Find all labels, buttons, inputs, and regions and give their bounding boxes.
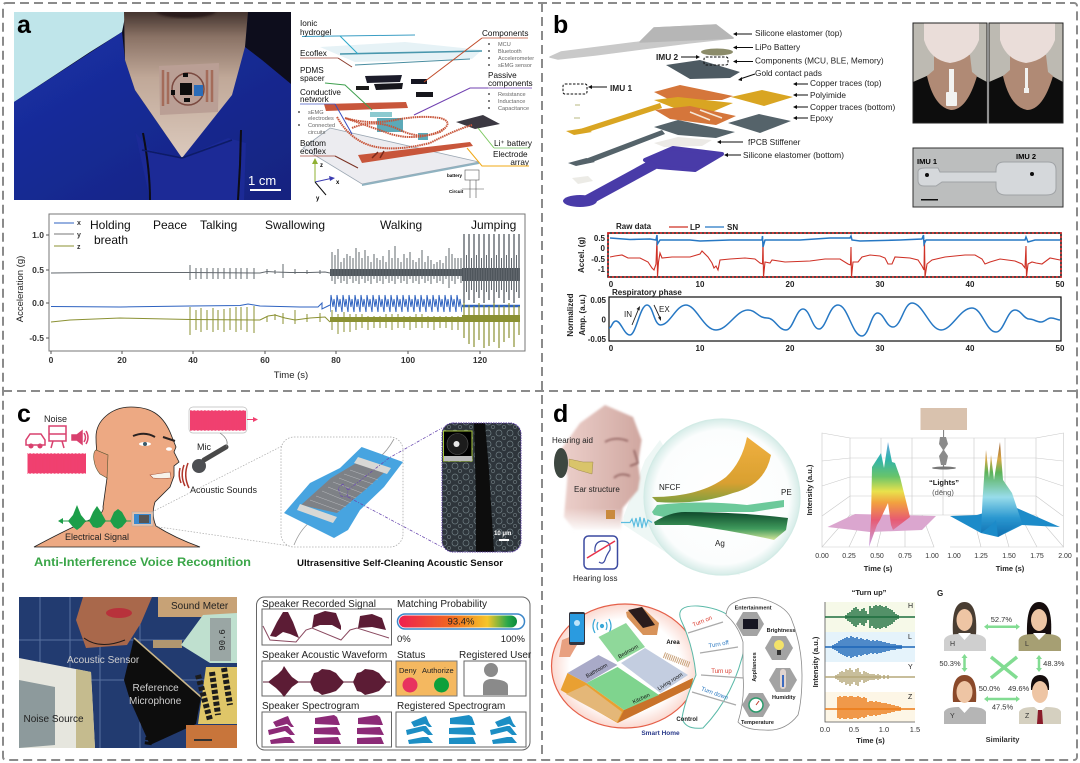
chart: respiratory phase: EX <box>659 305 670 314</box>
diagram sublabels: sEMG <box>308 110 324 116</box>
layer labels: Copper traces (bottom) <box>810 102 896 112</box>
room labels: Area <box>666 640 680 646</box>
photo: measurement setup <box>19 597 237 748</box>
xyz axes: z <box>320 163 323 169</box>
similarity values: 49.6% <box>1008 684 1030 693</box>
axes: 120 <box>473 355 487 365</box>
axes: -0.5 <box>29 333 44 343</box>
activity labels: Swallowing <box>265 218 325 232</box>
person letters: Y <box>950 713 955 720</box>
exploded device diagram <box>302 35 500 186</box>
icons: car, train, speaker <box>26 426 88 448</box>
diagram labels: array <box>510 158 530 167</box>
diagram labels: hydrogel <box>300 28 332 37</box>
layer labels: Copper traces (top) <box>810 78 882 88</box>
smart home illustration <box>552 604 698 737</box>
chart: raw acceleration data: 30 <box>876 280 885 289</box>
purple zoom lines <box>338 428 442 547</box>
3D waterfall chart <box>805 408 1072 573</box>
axes: 0 <box>49 355 54 365</box>
3D waterfall chart: 0.00 <box>815 553 829 560</box>
panel c <box>17 400 532 750</box>
photo: device on neck <box>913 23 987 123</box>
room labels: Kitchen <box>632 692 651 706</box>
person Y <box>944 675 986 724</box>
panel d <box>552 400 1072 745</box>
chart: raw acceleration data: Accel. (g) <box>577 237 586 273</box>
similarity values: 47.5% <box>992 702 1013 712</box>
xyz axes <box>312 158 340 202</box>
band labels <box>908 603 913 701</box>
photo: measurement setup: 90.6 <box>218 629 228 651</box>
icon: hearing loss <box>573 536 618 583</box>
y trace (gray) <box>51 234 520 303</box>
electrical signal waveform <box>58 505 131 530</box>
icon: phone in hand <box>559 612 585 657</box>
chart: respiratory phase: 0 <box>609 344 614 353</box>
axis titles: Time (s) <box>274 370 308 381</box>
chart: raw acceleration data <box>577 222 1065 289</box>
photo labels: Sound Meter <box>171 601 229 612</box>
appliances panel: Brightness <box>767 628 795 634</box>
acoustic waveform plot <box>262 661 392 697</box>
photo labels: Microphone <box>129 696 182 707</box>
z trace (olive) <box>51 303 520 348</box>
NFCF / PE / Ag layers: PE <box>781 488 792 497</box>
chart: respiratory phase: 50 <box>1056 344 1065 353</box>
axes: 40 <box>188 355 198 365</box>
chart: raw acceleration data: 0 <box>601 244 606 253</box>
axes: 80 <box>331 355 341 365</box>
3D waterfall chart: 1.00 <box>947 553 961 560</box>
person letters <box>950 641 1030 720</box>
exploded patch layers <box>550 25 793 207</box>
right waterfall surface <box>950 505 1060 537</box>
diagram labels: Bottom <box>300 139 326 148</box>
chart: respiratory phase: Amp. (a.u.) <box>578 294 587 336</box>
heading letter b: b <box>553 11 568 39</box>
chart: respiratory phase: -0.05 <box>588 335 607 344</box>
chart: turn up waveforms: Intensity (a.u.) <box>811 636 820 687</box>
sound wave <box>621 517 652 528</box>
matching probability bar: 93.4% <box>448 616 475 628</box>
similarity values: 50.0% <box>979 684 1000 693</box>
similarity values: 52.7% <box>991 615 1012 624</box>
left waterfall surface <box>828 514 936 532</box>
neck sensor patch <box>132 512 153 526</box>
waveform Y <box>825 668 915 686</box>
circuit inset: Circuit <box>449 189 464 194</box>
chart: raw acceleration data: 40 <box>966 280 975 289</box>
axes: 60 <box>260 355 270 365</box>
chart: acceleration vs time <box>15 214 525 381</box>
similarity values: 50.3% <box>939 659 961 668</box>
chart: respiratory phase: 0.05 <box>590 296 607 305</box>
chart: raw acceleration data: -0.5 <box>591 255 606 264</box>
acoustic sounds label: Acoustic Sounds <box>190 485 258 495</box>
control crescent: Control <box>676 717 698 723</box>
NFCF / PE / Ag layers <box>652 437 792 548</box>
chart: respiratory phase: 20 <box>786 344 795 353</box>
chart: respiratory phase <box>566 288 1065 353</box>
panel b <box>550 11 1065 353</box>
dashboard labels: Speaker Acoustic Waveform <box>262 650 387 661</box>
3D waterfall chart: 1.00 <box>925 553 939 560</box>
diagram labels: Electrode <box>493 150 528 159</box>
status box: Authorize <box>422 666 454 675</box>
layer arrows <box>590 34 808 155</box>
layer labels: Gold contact pads <box>755 68 822 78</box>
sensor illustration <box>281 437 403 547</box>
waveform H <box>825 605 915 629</box>
head labels: Hearing aid <box>552 436 593 445</box>
appliances panel: Temperature <box>741 720 774 726</box>
activity labels: breath <box>94 233 128 247</box>
chart: turn up waveforms: Time (s) <box>856 736 885 745</box>
waveform Z <box>825 696 915 719</box>
diagram labels: ecoflex <box>300 147 326 156</box>
layer labels <box>610 28 896 160</box>
diagram sublabels: Accelerometer <box>498 56 534 62</box>
chart labels: Time (s) <box>996 564 1025 573</box>
diagram labels: Ionic <box>300 19 317 28</box>
chart: raw acceleration data: 50 <box>1056 280 1065 289</box>
chart: respiratory phase: Respiratory phase <box>612 288 682 297</box>
room labels: Living room <box>657 672 684 692</box>
speaker spectrogram plot <box>262 712 392 747</box>
activity labels: Holding <box>90 218 131 232</box>
chart: raw acceleration data: Raw data <box>616 222 652 231</box>
control crescent <box>676 606 745 728</box>
panel a <box>14 4 534 381</box>
scale bar 1 cm: 1 cm <box>248 173 276 188</box>
head illustration <box>554 405 642 532</box>
dashboard labels: Registered User <box>459 650 532 661</box>
band labels: H <box>908 603 913 610</box>
diagram sublabels: Connected <box>308 123 335 129</box>
icon: wifi arcs <box>593 619 611 633</box>
3D waterfall chart: 2.00 <box>1058 553 1072 560</box>
axes: 0.0 <box>32 298 44 308</box>
diagram labels: Components <box>482 29 528 38</box>
bubble cone <box>621 440 740 575</box>
layer labels: IMU 1 <box>610 83 633 93</box>
xyz axes: y <box>316 196 320 202</box>
layer labels: LiPo Battery <box>755 42 801 52</box>
appliances panel: Entertainment <box>735 606 772 612</box>
3D waterfall chart: 0.75 <box>898 553 912 560</box>
chart: turn up waveforms: “Turn up” <box>852 588 887 597</box>
circuit inset <box>447 170 484 198</box>
registered spectrogram plot <box>396 712 526 747</box>
chart: respiratory phase: 40 <box>966 344 975 353</box>
dashboard labels: Matching Probability <box>397 599 487 610</box>
person letters: Z <box>1025 713 1030 720</box>
diagram sublabels <box>298 42 534 136</box>
3D waterfall chart: 1.75 <box>1030 553 1044 560</box>
person Z <box>1019 675 1061 724</box>
activity labels: Walking <box>380 218 422 232</box>
illustrated head and shoulders <box>34 407 200 547</box>
mic icon and label <box>192 433 227 473</box>
similarity diagram G <box>937 589 1065 744</box>
layer labels: Polyimide <box>810 90 846 100</box>
photo labels: Noise Source <box>24 714 84 725</box>
waveform L <box>825 636 915 658</box>
heading letter c: c <box>17 400 31 428</box>
similarity arrows <box>964 627 1039 699</box>
diagram labels: network <box>300 95 330 104</box>
chart labels <box>805 464 1025 573</box>
person letters: L <box>1025 641 1029 648</box>
circuit inset: battery <box>447 173 463 178</box>
mic icon and label: Mic <box>197 442 211 452</box>
diagram sublabels: sEMG sensor <box>498 63 532 69</box>
head labels: Ear structure <box>574 485 620 494</box>
layer labels: Components (MCU, BLE, Memory) <box>755 56 884 66</box>
axes: 20 <box>117 355 127 365</box>
layer labels: Epoxy <box>810 113 834 123</box>
chart: raw acceleration data: SN <box>727 223 738 232</box>
icon: hearing loss: Hearing loss <box>573 574 617 583</box>
electrical signal label: Electrical Signal <box>65 532 129 542</box>
bottom headings <box>34 555 503 569</box>
status box: Deny <box>399 666 417 675</box>
x trace (blue) <box>51 293 520 315</box>
smart home caption: Smart Home <box>641 730 680 737</box>
chart: raw acceleration data: 0 <box>609 280 614 289</box>
3D waterfall chart: 1.50 <box>1002 553 1016 560</box>
chart: raw acceleration data: 0.5 <box>594 234 606 243</box>
diagram sublabels: Inductance <box>498 99 525 105</box>
NFCF / PE / Ag layers: NFCF <box>659 483 680 492</box>
photo: device with IMU labels <box>913 148 1063 207</box>
dashboard labels: Speaker Spectrogram <box>262 701 359 712</box>
chart: respiratory phase: Normalized <box>566 293 575 337</box>
photo labels: Reference <box>132 683 179 694</box>
axes: 0.5 <box>32 265 44 275</box>
appliances panel: Appliances <box>752 652 758 682</box>
matching probability bar <box>397 614 526 645</box>
control crescent: Turn down <box>700 686 729 702</box>
dashboard labels <box>262 599 532 712</box>
chart: respiratory phase: IN <box>624 310 632 319</box>
material bubble <box>644 419 800 575</box>
chart labels: (dēng) <box>932 488 954 497</box>
microphone recording waveform <box>189 407 258 433</box>
diagram labels: Passive <box>488 71 517 80</box>
chart: turn up waveforms <box>811 588 920 745</box>
3D waterfall chart: 0.50 <box>870 553 884 560</box>
similarity diagram G: G <box>937 589 943 598</box>
noise waveform <box>28 454 86 473</box>
diagram labels: Conductive <box>300 88 341 97</box>
person letters: H <box>950 641 955 648</box>
appliances panel: Humidity <box>772 695 796 701</box>
heading letter d: d <box>553 400 568 428</box>
chart: turn up waveforms: 0.5 <box>849 725 859 734</box>
control crescent: Turn up <box>711 669 732 675</box>
control crescent: Turn off <box>708 640 730 650</box>
3D waterfall chart: 1.25 <box>974 553 988 560</box>
legend: y <box>77 232 81 239</box>
photo: device with IMU labels: IMU 2 <box>1016 152 1036 161</box>
diagram sublabels: MCU <box>498 42 511 48</box>
similarity values <box>939 615 1065 744</box>
head labels <box>552 436 620 494</box>
axes: 1.0 <box>32 230 44 240</box>
room labels: Bedroom <box>617 644 640 660</box>
chart labels: Intensity (a.u.) <box>805 464 814 515</box>
band labels: L <box>908 634 912 641</box>
chart: turn up waveforms: 0.0 <box>820 725 830 734</box>
room labels: Bathroom <box>585 662 609 680</box>
dashboard labels: Status <box>397 650 425 661</box>
legend <box>54 220 81 251</box>
3D waterfall chart: 0.25 <box>842 553 856 560</box>
noise label: Noise <box>44 414 67 424</box>
bottom headings: Ultrasensitive Self-Cleaning Acoustic Sensor <box>297 558 503 569</box>
person L <box>1019 602 1061 651</box>
chart: raw acceleration data: LP <box>690 223 701 232</box>
photo: neck sensor on person in blue hoodie <box>14 4 291 200</box>
diagram sublabels: circuits <box>308 130 326 136</box>
SEM micrograph: 10 μm <box>494 531 511 537</box>
chart: respiratory phase: 0 <box>602 316 607 324</box>
layer labels: Silicone elastomer (bottom) <box>743 150 844 160</box>
similarity values: Similarity <box>986 735 1020 744</box>
axis titles <box>15 256 308 381</box>
NFCF / PE / Ag layers: Ag <box>715 539 725 548</box>
diagram labels: components <box>488 79 533 88</box>
control crescent: Turn on <box>692 615 713 629</box>
dashboard labels: Speaker Recorded Signal <box>262 599 376 610</box>
axis titles: Acceleration (g) <box>15 256 26 322</box>
photo: device on neck, second view <box>989 23 1063 123</box>
lamp <box>920 408 967 470</box>
chart: respiratory phase: 10 <box>696 344 705 353</box>
diagram labels: Li⁺ battery <box>494 139 533 148</box>
photo: device with IMU labels: IMU 1 <box>917 157 937 166</box>
heading letter a: a <box>17 11 32 39</box>
diagram arrows <box>325 36 529 168</box>
SEM micrograph <box>442 423 521 552</box>
recorded signal plot <box>262 609 392 645</box>
axes <box>29 230 487 365</box>
chart: raw acceleration data: -1 <box>598 265 606 274</box>
chart: raw acceleration data: 20 <box>786 280 795 289</box>
photo labels: Acoustic Sensor <box>67 655 140 666</box>
authentication dashboard <box>256 597 532 750</box>
layer labels: fPCB Stiffener <box>748 137 801 147</box>
matching probability bar: 100% <box>501 634 526 645</box>
activity labels: Peace <box>153 218 187 232</box>
chart: turn up waveforms: 1.0 <box>879 725 889 734</box>
diagram labels: spacer <box>300 74 325 83</box>
chart: respiratory phase: 30 <box>876 344 885 353</box>
band labels: Z <box>908 694 913 701</box>
diagram labels: Ecoflex <box>300 49 327 58</box>
xyz axes: x <box>336 180 340 186</box>
chart: raw acceleration data: 10 <box>696 280 705 289</box>
legend: z <box>77 244 81 251</box>
diagram labels: PDMS <box>300 66 324 75</box>
diagram sublabels: Bluetooth <box>498 49 522 55</box>
band labels: Y <box>908 664 913 671</box>
legend: x <box>77 220 81 227</box>
diagram sublabels: Capacitance <box>498 106 529 112</box>
dashboard labels: Registered Spectrogram <box>397 701 505 712</box>
diagram sublabels: Resistance <box>498 92 526 98</box>
activity labels: Jumping <box>471 218 516 232</box>
layer labels: Silicone elastomer (top) <box>755 28 842 38</box>
house rooms <box>561 607 693 723</box>
activity labels <box>90 218 516 247</box>
layer labels: IMU 2 <box>656 52 679 62</box>
chart labels: “Lights” <box>929 478 959 487</box>
diagram sublabels: electrodes <box>308 116 334 122</box>
photo labels <box>24 601 229 725</box>
appliances panel <box>726 598 802 730</box>
bottom headings: Anti-Interference Voice Recognition <box>34 555 251 569</box>
status box <box>396 661 457 696</box>
registered user icon <box>464 661 526 696</box>
diagram labels <box>300 19 533 167</box>
zoom connector lines <box>152 445 290 546</box>
axes: 100 <box>401 355 415 365</box>
person H <box>944 602 986 651</box>
chart: turn up waveforms: 1.5 <box>910 725 920 734</box>
activity labels: Talking <box>200 218 237 232</box>
room labels <box>585 640 684 706</box>
acoustic wave arcs <box>179 463 189 488</box>
chart labels: Time (s) <box>864 564 893 573</box>
similarity values: 48.3% <box>1043 659 1065 668</box>
matching probability bar: 0% <box>397 634 411 645</box>
